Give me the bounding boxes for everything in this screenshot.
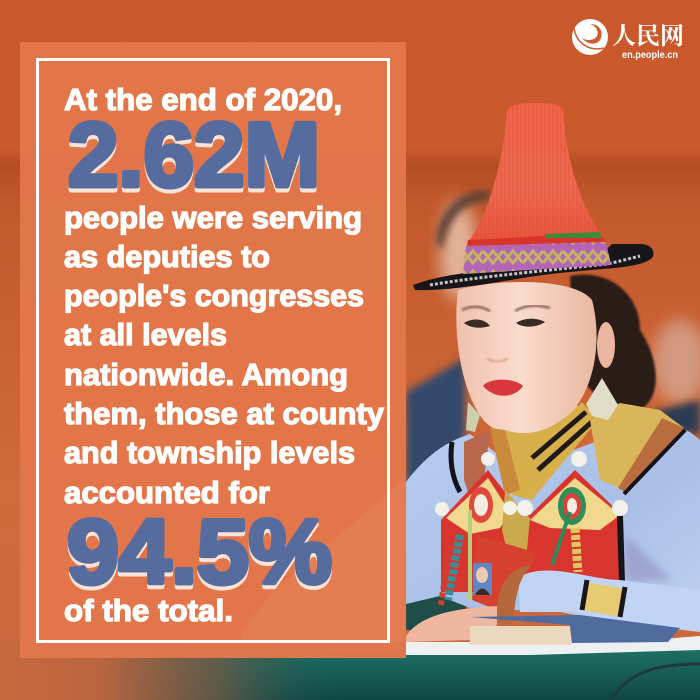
background: table bbox=[0, 640, 700, 700]
embroidered vest bbox=[441, 470, 622, 592]
earring right bbox=[586, 378, 618, 420]
text: body paragraph: as deputies to bbox=[64, 239, 270, 274]
neck bbox=[490, 395, 590, 475]
background: blurred people bbox=[406, 190, 700, 510]
robe bbox=[406, 412, 700, 628]
hat bbox=[413, 103, 654, 290]
logo: People's Daily Online bbox=[572, 19, 684, 61]
earring left bbox=[466, 402, 480, 432]
lips bbox=[483, 380, 523, 396]
text: at the end of 2020: At the end of 2020, bbox=[64, 82, 342, 117]
frame: white border bbox=[38, 60, 388, 642]
dark seat behind left arm bbox=[406, 590, 466, 630]
photo: delegate in traditional dress bbox=[406, 103, 700, 655]
text: body paragraph: them, those at county bbox=[64, 396, 385, 431]
text: body paragraph: accounted for bbox=[64, 475, 270, 510]
delegate badge bbox=[472, 535, 537, 610]
big number: 94.5%: 94.5% bbox=[67, 506, 332, 607]
bead strings bbox=[441, 510, 578, 605]
woven band bbox=[463, 242, 611, 274]
brim bbox=[413, 244, 654, 290]
nose shadow bbox=[487, 358, 508, 362]
text: body paragraph: at all levels bbox=[64, 317, 227, 352]
hair bbox=[570, 275, 656, 410]
text: body paragraph: people were serving bbox=[64, 200, 362, 235]
text: body paragraph bbox=[64, 200, 385, 510]
forearm sleeve bbox=[497, 565, 700, 632]
ear bbox=[597, 322, 615, 368]
hand showing through panel bbox=[240, 478, 406, 642]
text: of the total: of the total. bbox=[64, 593, 233, 628]
logo url: en.people.cn bbox=[622, 50, 678, 61]
silver discs bbox=[435, 451, 628, 516]
tassel crown bbox=[468, 103, 604, 242]
shoulder sash right bbox=[590, 403, 684, 490]
shoulder strap left bbox=[464, 430, 490, 498]
face bbox=[456, 282, 597, 436]
eyebrows bbox=[462, 306, 550, 311]
left eye bbox=[464, 320, 490, 328]
text: body paragraph: people's congresses bbox=[64, 278, 364, 313]
big number: 2.62M: 2.62M bbox=[68, 109, 320, 210]
logo swirl icon bbox=[572, 19, 608, 55]
robe shadow bbox=[625, 535, 672, 582]
coloured trim bbox=[467, 233, 606, 246]
hand bbox=[406, 606, 497, 642]
collar bbox=[490, 402, 598, 500]
papers bbox=[406, 636, 700, 655]
right eye bbox=[516, 319, 545, 327]
logo chinese wordmark: 人民网 bbox=[612, 23, 684, 50]
panel: translucent orange bbox=[20, 42, 406, 658]
book bbox=[470, 615, 680, 645]
text: body paragraph: nationwide. Among bbox=[64, 357, 348, 392]
big number: 2.62M: 2.62M bbox=[68, 105, 320, 206]
text: body paragraph: and township levels bbox=[64, 435, 355, 470]
big number: 94.5%: 94.5% bbox=[67, 502, 332, 603]
